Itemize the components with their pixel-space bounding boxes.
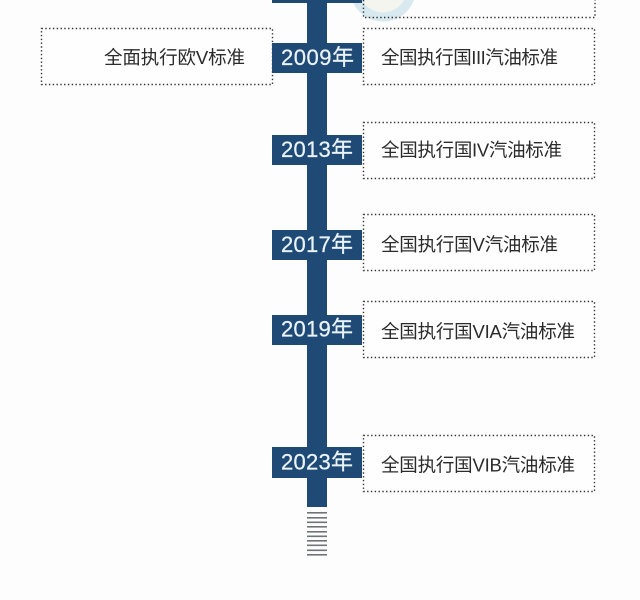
event 2017 <box>364 214 594 270</box>
event 2023 <box>364 436 594 492</box>
event 2009 <box>364 28 594 84</box>
2013 milestone: 2013年 <box>281 137 353 162</box>
2019 milestone <box>272 315 362 345</box>
top year label fragment <box>272 0 362 3</box>
2009 milestone: 2009年 <box>281 45 354 70</box>
left event: 全面执行欧V标准 <box>42 28 272 84</box>
2023 milestone <box>272 447 362 478</box>
2017 milestone <box>272 230 362 260</box>
2009 milestone <box>272 43 362 73</box>
2023 milestone: 2023年 <box>281 450 353 474</box>
event 2019: 全国执行国VIA汽油标准 <box>381 321 575 342</box>
event 2009: 全国执行国III汽油标准 <box>381 47 558 68</box>
event 2017: 全国执行国V汽油标准 <box>381 234 558 255</box>
2013 milestone <box>272 135 362 165</box>
timeline spine <box>307 0 327 507</box>
2019 milestone: 2019年 <box>281 316 353 342</box>
event 2013: 全国执行国IV汽油标准 <box>381 140 562 160</box>
top box fragment <box>364 0 595 18</box>
watermark circle fragment <box>352 0 414 22</box>
event 2023: 全国执行国VIB汽油标准 <box>381 454 575 476</box>
event 2019 <box>364 302 594 358</box>
striped timeline end <box>307 512 327 556</box>
2017 milestone: 2017年 <box>281 232 353 257</box>
left event: 全面执行欧V标准: 全面执行欧V标准 <box>104 47 245 68</box>
event 2013 <box>364 122 594 178</box>
